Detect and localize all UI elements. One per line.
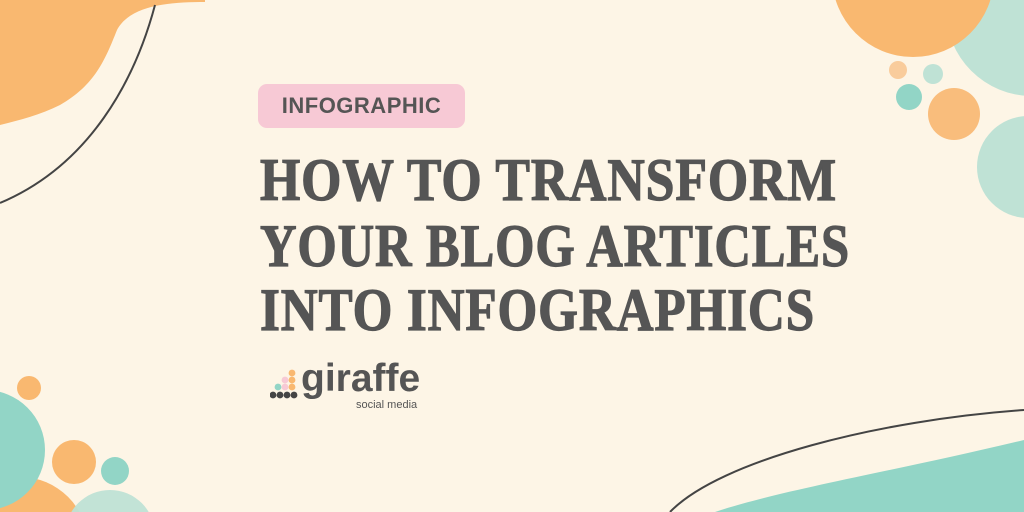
line: top-left curve [0,5,155,203]
logo: giraffe social media [270,357,420,411]
icon: dots [270,370,298,398]
tag: INFOGRAPHIC [258,84,465,128]
circles: top-right [832,0,1024,218]
title: YOUR BLOG ARTICLES [260,213,850,279]
blob: bottom-right teal [715,440,1024,512]
title [260,147,850,343]
tag: INFOGRAPHIC: INFOGRAPHIC [282,93,441,118]
circles: bottom-left [0,376,155,512]
logo: giraffe social media: social media [356,399,417,411]
title: HOW TO TRANSFORM [260,147,837,213]
blob: top-left orange [0,0,205,125]
title: INTO INFOGRAPHICS [260,277,815,343]
line: bottom-right curve [670,410,1024,512]
logo: giraffe social media: giraffe [301,357,420,400]
